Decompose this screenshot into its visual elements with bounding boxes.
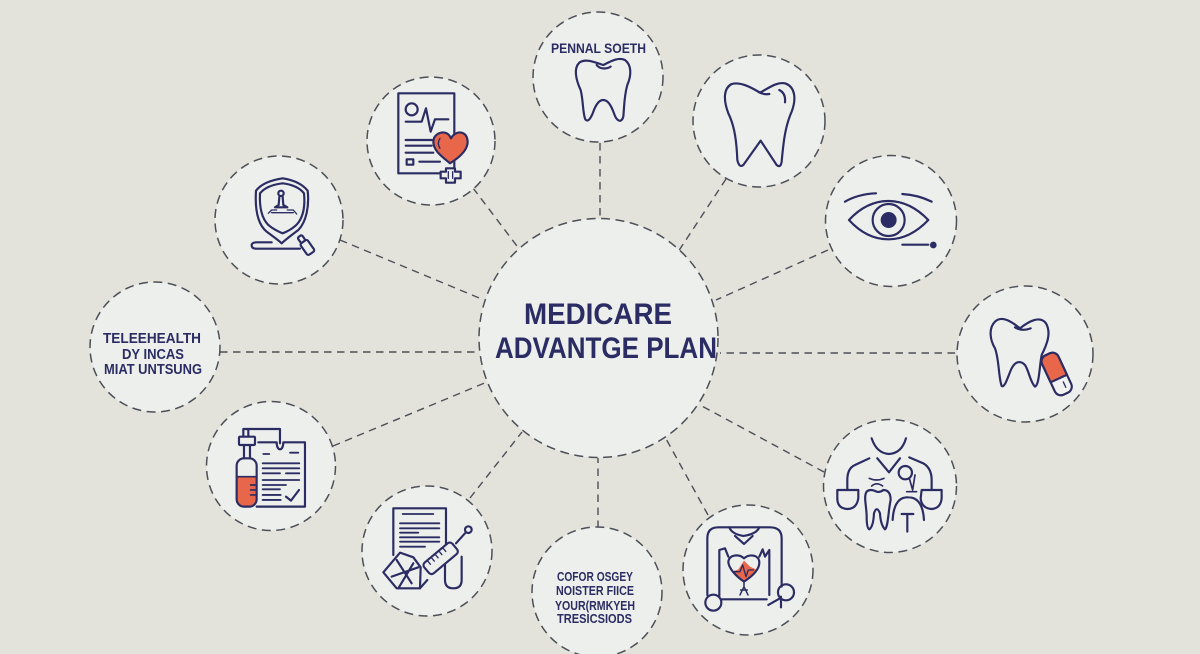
dashed connectors from hub to satellites bbox=[220, 143, 955, 528]
label: telehealth: DY INCAS bbox=[122, 347, 184, 363]
label: telehealth: TELEEHEALTH bbox=[103, 331, 201, 347]
panel: telehealth text bbox=[90, 282, 220, 412]
icon: document, box and syringe bbox=[383, 508, 472, 588]
panel: bottom text bbox=[532, 527, 662, 654]
panel: dentist bbox=[824, 420, 956, 552]
icon: vial and checklist bbox=[237, 429, 305, 507]
panel: top tooth with label bbox=[533, 12, 663, 142]
label: bottom text block bbox=[555, 570, 635, 626]
icon: shirt, heart and magnifier bbox=[705, 527, 794, 611]
hub title: MEDICARE bbox=[524, 298, 672, 331]
panel: eye bbox=[826, 156, 956, 286]
panel: tooth with capsule bbox=[957, 286, 1093, 422]
hub title bbox=[495, 298, 717, 365]
panel: vial and checklist bbox=[206, 402, 336, 530]
icon: medical record and heart bbox=[398, 93, 468, 183]
icon: tooth bbox=[576, 59, 630, 121]
label: bottom text block: NOISTER FIICE bbox=[556, 584, 634, 598]
label: bottom text block: YOUR(RMKYEH bbox=[555, 599, 635, 613]
hub title: ADVANTGE PLAN bbox=[495, 332, 717, 365]
icon: dentist figure with tooth bbox=[837, 438, 942, 532]
label: telehealth: MIAT UNTSUNG bbox=[104, 362, 202, 378]
central hub: Medicare Advantage Plan bbox=[479, 218, 718, 458]
icon: large tooth bbox=[725, 83, 794, 166]
label: telehealth bbox=[103, 331, 202, 378]
icon: tooth and capsule bbox=[991, 319, 1074, 397]
panel: shield with stamp bbox=[215, 156, 343, 284]
panel: large tooth bbox=[693, 55, 825, 187]
label: bottom text block: COFOR OSGEY bbox=[557, 570, 634, 584]
icon: eye bbox=[845, 193, 937, 248]
panel: chest with heart bbox=[683, 505, 813, 635]
icon: shield, stamp and pen bbox=[252, 178, 315, 256]
panel: medical record with heart bbox=[367, 77, 495, 205]
label: Pennal Soeth: PENNAL SOETH bbox=[551, 41, 646, 56]
label: bottom text block: TRESICSIODS bbox=[557, 612, 632, 626]
panel: document and syringe bbox=[362, 486, 492, 616]
